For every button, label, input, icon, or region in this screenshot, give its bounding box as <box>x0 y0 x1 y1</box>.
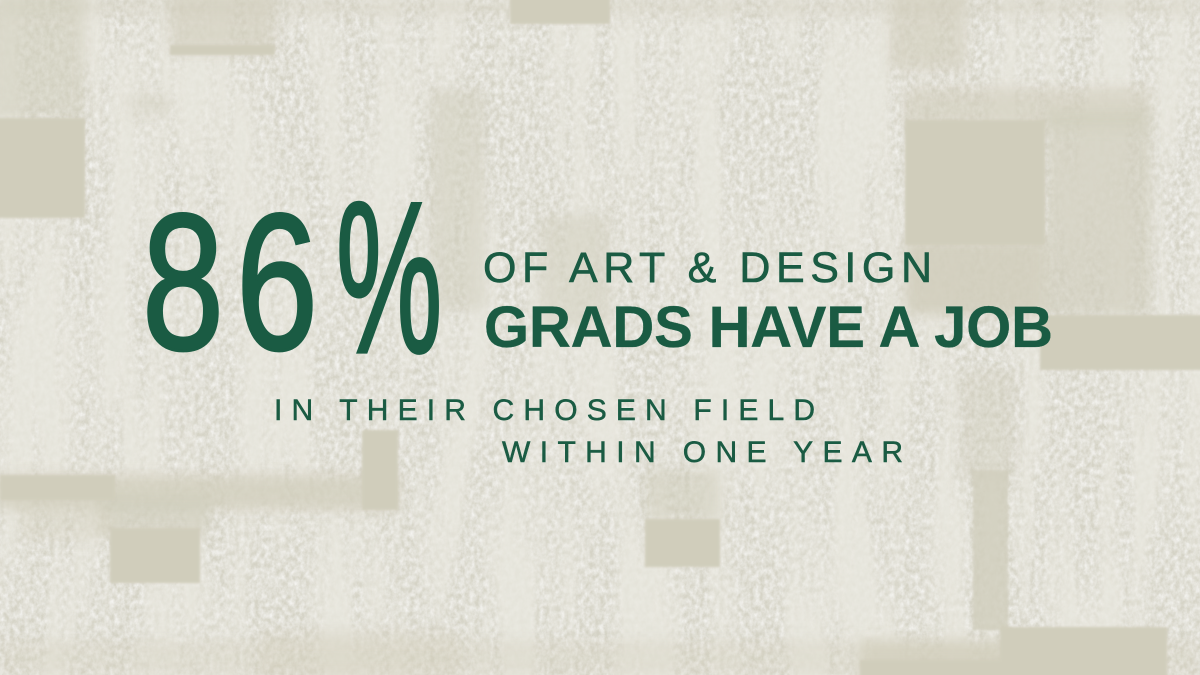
statistic: 86%: 8 <box>142 173 224 391</box>
heading: of art and design grads have a job: GRADS HAVE A JOB <box>484 295 1053 360</box>
heading: of art and design grads have a job <box>483 244 1053 360</box>
statistic: 86%: % <box>336 157 442 398</box>
subtext: in their chosen field within one year: WITHIN ONE YEAR <box>502 436 903 469</box>
statistic: 86%: 6 <box>236 173 318 391</box>
heading: of art and design grads have a job: OF ART & DESIGN <box>483 244 932 292</box>
subtext: in their chosen field within one year: IN THEIR CHOSEN FIELD <box>274 394 815 427</box>
statistic: 86% <box>142 157 442 398</box>
subtext: in their chosen field within one year <box>274 394 903 469</box>
